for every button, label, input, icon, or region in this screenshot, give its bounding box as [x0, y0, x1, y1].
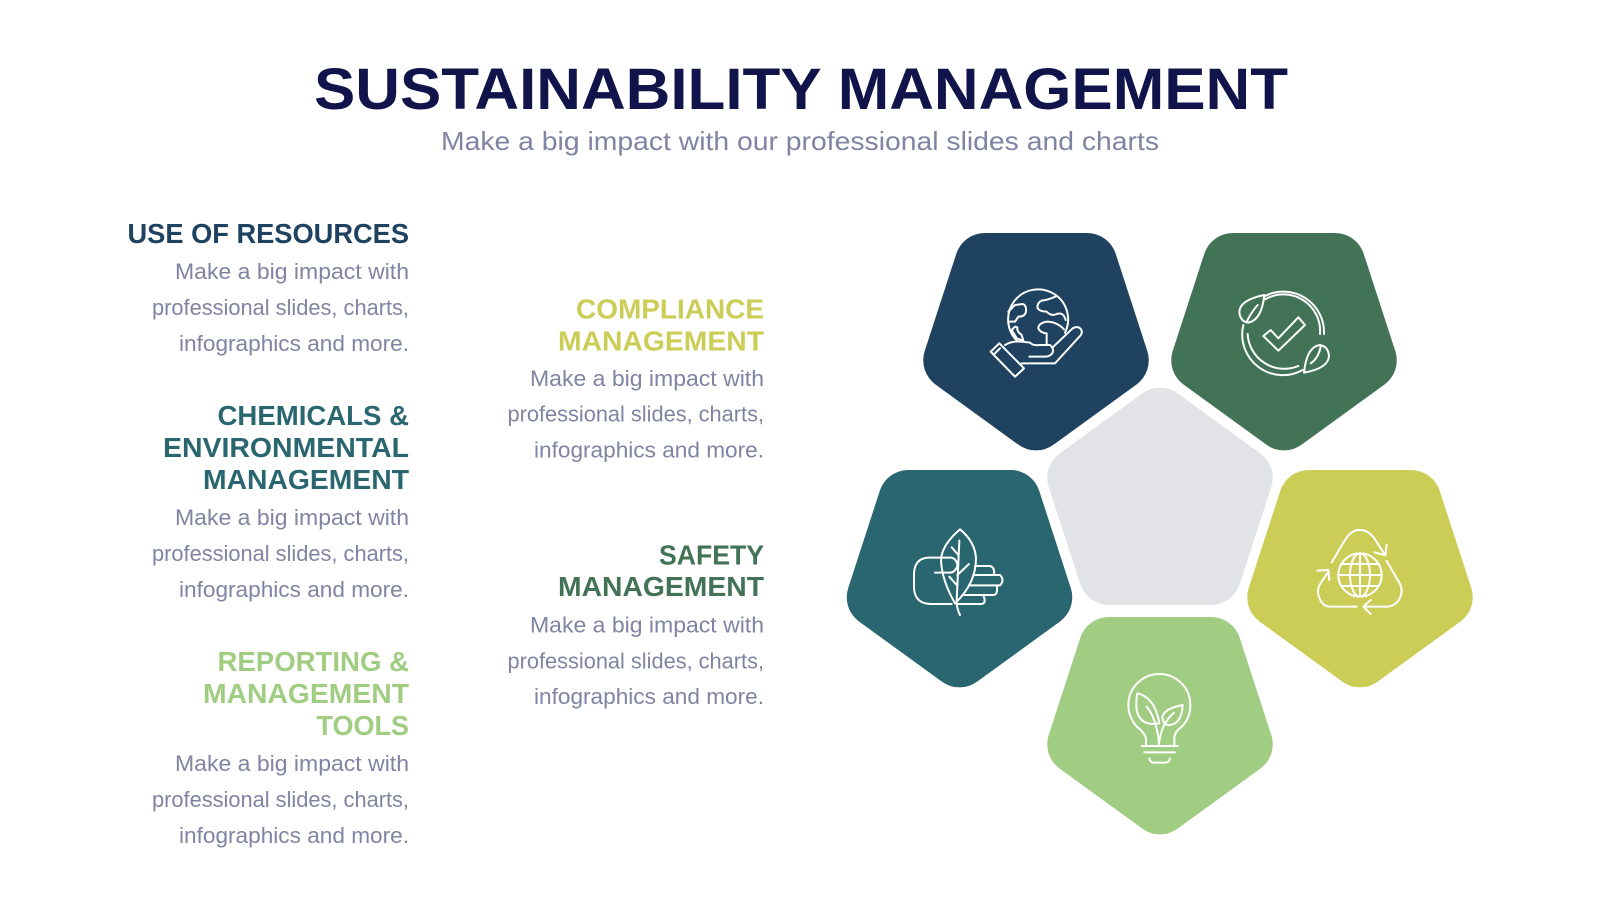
- body: use of resources: infographics and more.: [179, 331, 409, 356]
- body: use of resources: Make a big impact with: [175, 259, 409, 284]
- body: use of resources: [152, 259, 409, 356]
- body: safety management: [508, 612, 764, 709]
- heading: reporting and management tools: REPORTING &: [218, 646, 409, 677]
- heading: compliance management: [558, 294, 764, 356]
- icon: leaves around check mark: [1239, 292, 1329, 375]
- body: chemicals and environmental management: infographics and more.: [179, 577, 409, 602]
- icon: hand holding globe: [991, 289, 1082, 377]
- center pentagon: [1047, 388, 1273, 605]
- body: compliance management: professional slides, charts,: [508, 402, 764, 426]
- body: reporting and management tools: professional slides, charts,: [152, 787, 409, 812]
- heading: chemicals and environmental management: ENVIRONMENTAL: [163, 432, 409, 463]
- title: SUSTAINABILITY MANAGEMENT: [314, 57, 1288, 122]
- heading: chemicals and environmental management: [163, 400, 409, 495]
- body: reporting and management tools: [152, 751, 409, 848]
- text block: chemicals and environmental management: [152, 400, 409, 602]
- heading: chemicals and environmental management: CHEMICALS &: [218, 400, 409, 431]
- heading: reporting and management tools: MANAGEMENT: [203, 678, 409, 709]
- heading: compliance management: COMPLIANCE: [576, 294, 764, 324]
- body: safety management: professional slides, charts,: [508, 648, 764, 674]
- text block: compliance management: [508, 294, 764, 462]
- heading: safety management: SAFETY: [659, 540, 764, 570]
- subtitle: Make a big impact with our professional slides and charts: [441, 126, 1159, 156]
- heading: reporting and management tools: TOOLS: [316, 710, 409, 741]
- body: use of resources: professional slides, charts,: [152, 295, 409, 320]
- body: safety management: infographics and more.: [534, 684, 764, 709]
- body: chemicals and environmental management: professional slides, charts,: [152, 541, 409, 566]
- body: reporting and management tools: infographics and more.: [179, 823, 409, 848]
- body: reporting and management tools: Make a big impact with: [175, 751, 409, 776]
- heading: chemicals and environmental management: MANAGEMENT: [203, 464, 409, 495]
- pentagon: chemicals and environmental management: [847, 470, 1072, 687]
- heading: compliance management: MANAGEMENT: [558, 326, 764, 356]
- pentagon: use of resources: [923, 233, 1149, 450]
- heading: safety management: MANAGEMENT: [558, 571, 764, 602]
- icon: hand with leaf: [914, 529, 1002, 615]
- body: compliance management: Make a big impact with: [530, 366, 764, 391]
- pentagon: reporting and management tools: [1047, 617, 1273, 834]
- icon: light bulb with leaves: [1128, 674, 1190, 763]
- body: compliance management: infographics and more.: [534, 438, 764, 462]
- heading: reporting and management tools: [203, 646, 409, 741]
- body: safety management: Make a big impact with: [530, 612, 764, 638]
- pentagon diagram: [847, 233, 1473, 834]
- body: chemicals and environmental management: Make a big impact with: [175, 505, 409, 530]
- text block: safety management: [508, 540, 764, 709]
- pentagon: compliance management: [1247, 470, 1473, 687]
- heading: use of resources: USE OF RESOURCES: [128, 218, 409, 249]
- text block: reporting and management tools: [152, 646, 409, 848]
- text block: use of resources: [128, 218, 409, 356]
- icon: recycling arrows around globe: [1317, 530, 1402, 614]
- body: compliance management: [508, 366, 764, 462]
- heading: safety management: [558, 540, 764, 602]
- body: chemicals and environmental management: [152, 505, 409, 602]
- pentagon: safety management: [1171, 233, 1397, 450]
